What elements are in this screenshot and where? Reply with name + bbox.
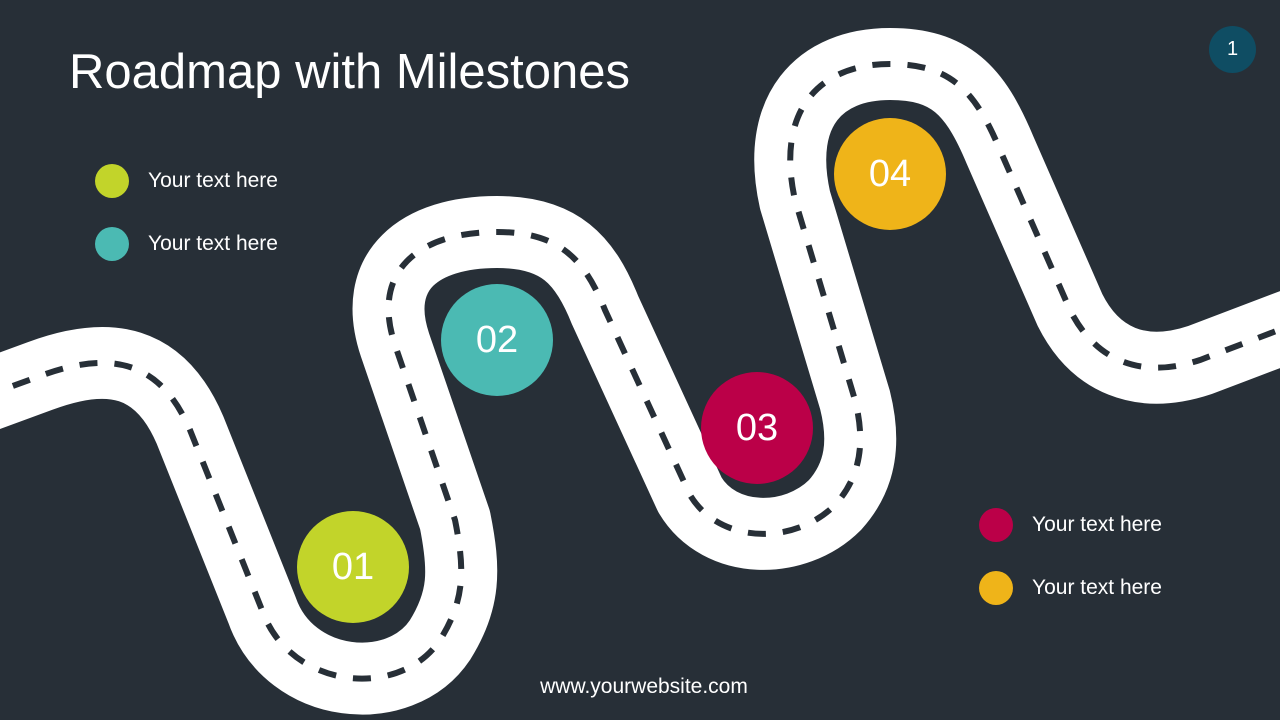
legend item teal: Your text here — [148, 232, 278, 255]
legend item green — [95, 164, 278, 198]
milestone 02 — [441, 284, 553, 396]
milestone 04: 04 — [869, 153, 911, 195]
milestone 01: 01 — [332, 546, 374, 588]
title: Roadmap with Milestones — [69, 45, 630, 99]
milestone 02: 02 — [476, 319, 518, 361]
milestone 01 — [297, 511, 409, 623]
legend item teal — [95, 227, 278, 261]
legend item yellow: Your text here — [1032, 576, 1162, 599]
legend item green: Your text here — [148, 169, 278, 192]
legend item crimson: Your text here — [1032, 513, 1162, 536]
footer website: www.yourwebsite.com — [540, 675, 748, 698]
legend item yellow — [979, 571, 1162, 605]
milestone 03: 03 — [736, 407, 778, 449]
page number badge — [1209, 26, 1256, 73]
milestone 03 — [701, 372, 813, 484]
milestone 04 — [834, 118, 946, 230]
legend item crimson — [979, 508, 1162, 542]
page number badge: 1 — [1227, 38, 1238, 60]
